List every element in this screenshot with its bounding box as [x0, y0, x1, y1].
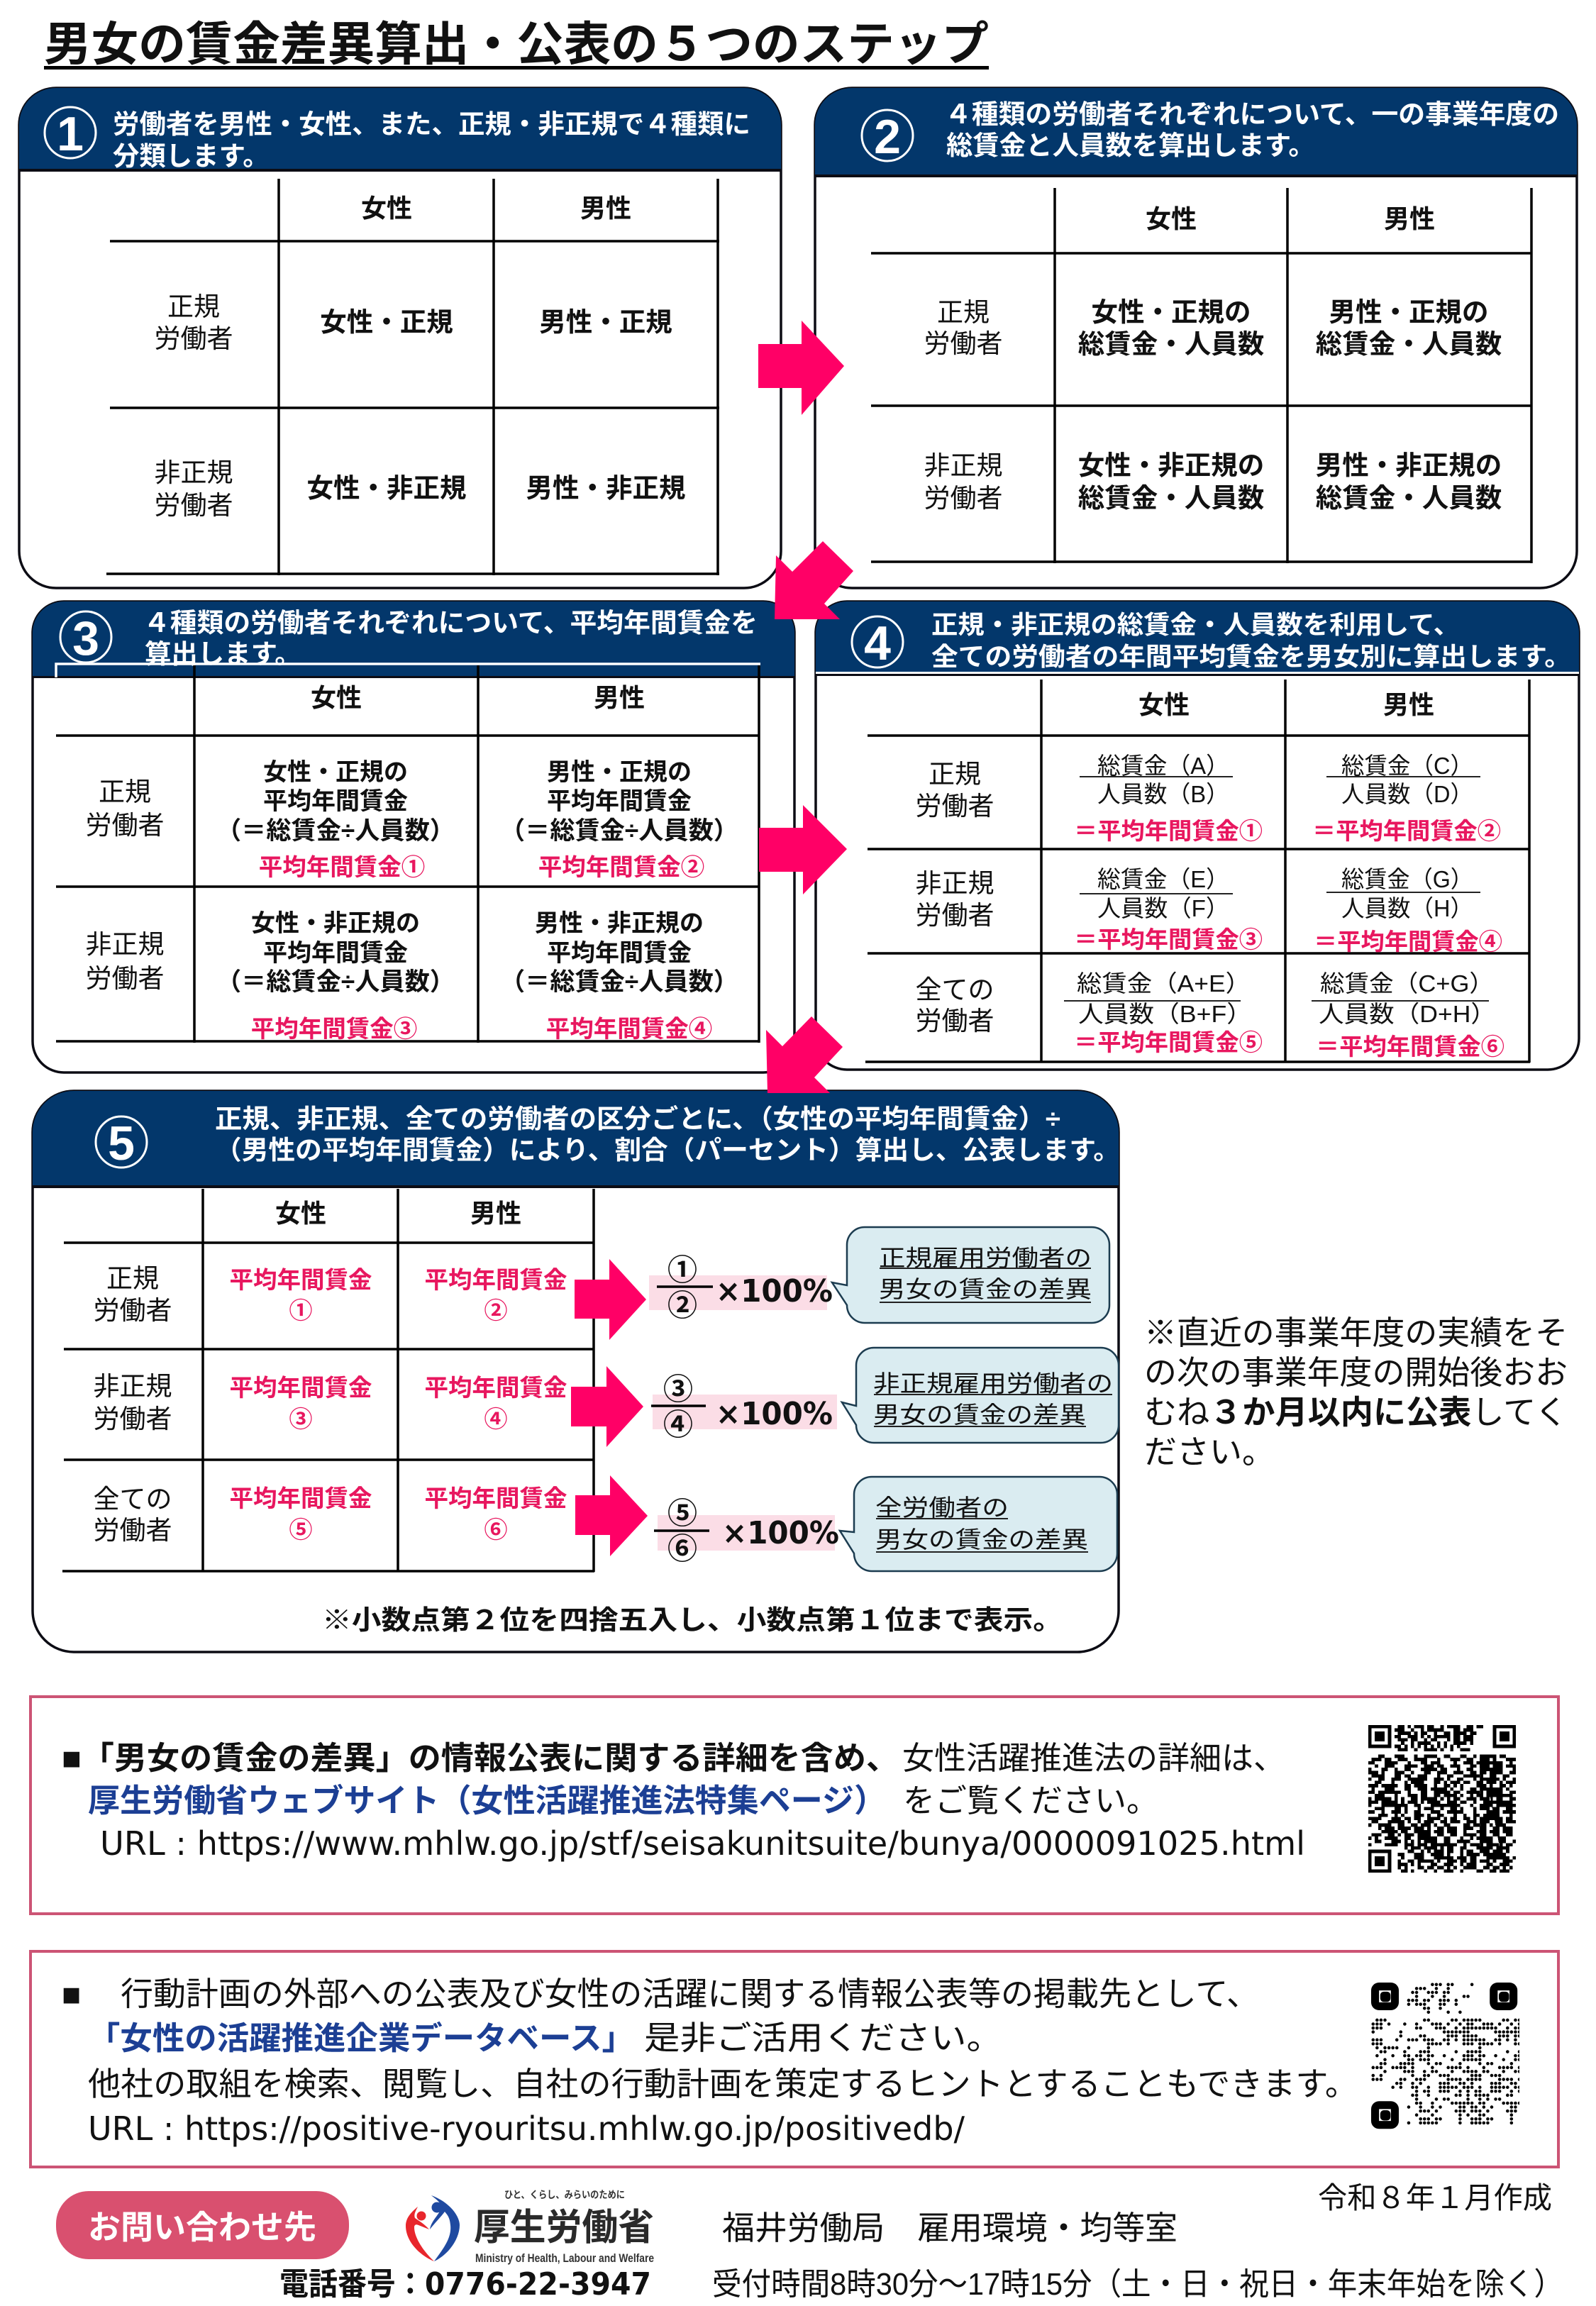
step 2 header: ４種類の労働者それぞれについて、一の事業年度の [945, 99, 1559, 129]
info box: company database: 「女性の活躍推進企業データベース」 [88, 2020, 634, 2056]
panel: step 2 [815, 88, 1577, 588]
step 4 table: 全ての [915, 975, 994, 1004]
step 4 header [816, 602, 1579, 676]
panel: step 4 [816, 602, 1579, 1070]
step 4 table: ＝平均年間賃金② [1312, 818, 1501, 844]
callout: non-regular workers gap [842, 1348, 1119, 1443]
MHLW logo: 厚生労働省 [474, 2207, 654, 2249]
step 3 table: 女性 [311, 683, 362, 712]
step 1 header: 1 [57, 107, 84, 161]
step 3 table: （＝総賃金÷人員数） [216, 817, 455, 845]
step 2 table: 総賃金・人員数 [1316, 483, 1502, 513]
step 3 table: 男性 [594, 683, 645, 712]
info box: company database: URL : https://positive-ryouritsu.mhlw.go.jp/positivedb/ [88, 2110, 965, 2148]
step 2 table: 男性・正規の [1329, 297, 1488, 327]
formula: all workers: ×100% [722, 1515, 839, 1551]
step 5 table: ② [484, 1297, 508, 1324]
step 4 table: 総賃金（A） [1097, 753, 1229, 779]
step 5 table: ⑤ [289, 1517, 312, 1543]
step 4 header: 4 [864, 616, 891, 670]
step 5 table: 男性 [470, 1199, 521, 1228]
step 3 table: 女性・正規の [263, 759, 408, 786]
step 3 table: 平均年間賃金 [547, 940, 692, 967]
formula: non-regular workers: ③ [663, 1373, 693, 1406]
step 5 table: 平均年間賃金 [424, 1486, 567, 1512]
step 5 table: 平均年間賃金 [230, 1486, 372, 1512]
callout: all workers gap: 男女の賃金の差異 [875, 1526, 1088, 1553]
step 5 table: 労働者 [94, 1516, 172, 1545]
step 5 table: 女性 [275, 1199, 326, 1228]
step 5 header: 正規、非正規、全ての労働者の区分ごとに、（女性の平均年間賃金）÷ [215, 1104, 1060, 1133]
reception hours: 受付時間8時30分～17時15分（土・日・祝日・年末年始を除く） [712, 2267, 1563, 2302]
step 1 table: 男性 [580, 194, 631, 223]
callout: all workers gap: 全労働者の [875, 1495, 1009, 1521]
formula: non-regular workers [651, 1373, 837, 1441]
step 5 table: 平均年間賃金 [230, 1268, 372, 1294]
panel: step 1 [19, 88, 781, 588]
step 3 table: （＝総賃金÷人員数） [500, 817, 738, 845]
step 4 table: 総賃金（C+G） [1320, 970, 1494, 997]
step 2 table [871, 188, 1532, 563]
step 2 table: 非正規 [924, 451, 1003, 480]
step 1 table: 女性 [361, 194, 412, 223]
step 1 table: 労働者 [155, 324, 233, 353]
formula: non-regular workers: ④ [663, 1408, 693, 1441]
step 4 table: ＝平均年間賃金⑤ [1074, 1029, 1263, 1055]
QR code 1 [1368, 1725, 1516, 1873]
step 2 header: 2 [874, 110, 901, 164]
step 5 table: 平均年間賃金 [230, 1375, 372, 1402]
step 3 table: 平均年間賃金① [259, 855, 425, 881]
step 5 table: 正規 [106, 1264, 159, 1293]
step 4 table: ＝平均年間賃金③ [1074, 926, 1263, 953]
step 5 table: ③ [289, 1406, 312, 1432]
formula: regular workers [649, 1253, 833, 1322]
step 5 table: 平均年間賃金 [424, 1375, 567, 1402]
step 3 table [56, 665, 760, 1043]
step 4 table [865, 680, 1530, 1063]
info box: company database: 是非ご活用ください。 [644, 2019, 1002, 2056]
step 5 header [33, 1091, 1120, 1188]
publication timing note: むね３か月以内に公表してく [1144, 1394, 1568, 1431]
step 4 table: 人員数（H） [1341, 895, 1473, 921]
formula: all workers: ⑤ [667, 1497, 697, 1530]
info box: MHLW website: ■「男女の賃金の差異」の情報公表に関する詳細を含め、 [62, 1740, 899, 1776]
step 3 header [33, 602, 794, 678]
step 5 table: ④ [484, 1406, 508, 1432]
step 1 table: 労働者 [155, 491, 233, 520]
step 4 table: 男性 [1383, 690, 1434, 719]
info box: MHLW website: 女性活躍推進法の詳細は、 [902, 1740, 1285, 1776]
step 1 table: 非正規 [155, 458, 233, 487]
step 5 table [62, 1189, 594, 1572]
step 4 table: 女性 [1138, 690, 1190, 719]
step 4 table: 総賃金（C） [1341, 753, 1473, 779]
step 4 table: 人員数（D+H） [1319, 1001, 1496, 1027]
panel: step 3 [33, 602, 794, 1072]
step 2 table: 女性 [1146, 204, 1197, 233]
rounding note: ※小数点第２位を四捨五入し、小数点第１位まで表示。 [322, 1606, 1063, 1636]
info box: company database: 行動計画の外部への公表及び女性の活躍に関する情報公表等の掲載先として、 [121, 1975, 1259, 2012]
arrow: step 4 to 5 [766, 1016, 843, 1093]
step 3 header: 3 [72, 611, 99, 665]
step 5 table: ⑥ [484, 1517, 508, 1543]
arrow: to all workers formula [575, 1475, 648, 1556]
step 4 table: 人員数（B） [1097, 781, 1229, 807]
callout: non-regular workers gap: 男女の賃金の差異 [873, 1402, 1086, 1428]
step 2 table: 総賃金・人員数 [1078, 329, 1264, 359]
publication timing note: ださい。 [1144, 1434, 1275, 1470]
QR code 2 [1371, 1983, 1519, 2129]
step 2 table: 男性 [1384, 204, 1435, 233]
step 2 table: 正規 [937, 298, 990, 327]
step 1 header [19, 88, 781, 172]
step 4 table: 総賃金（G） [1341, 866, 1473, 892]
step 3 table: 平均年間賃金 [263, 788, 408, 815]
step 3 table: 労働者 [85, 964, 165, 993]
step 2 table: 労働者 [924, 484, 1003, 513]
step 1 header: 労働者を男性・女性、また、正規・非正規で４種類に [113, 109, 750, 139]
step 4 table: 人員数（B+F） [1078, 1001, 1252, 1027]
step 2 table: 女性・正規の [1091, 297, 1251, 327]
step 4 table: 総賃金（E） [1097, 866, 1229, 892]
arrow: step 2 to 3 [775, 541, 853, 619]
callout: non-regular workers gap: 非正規雇用労働者の [873, 1370, 1113, 1397]
step 3 header: ４種類の労働者それぞれについて、平均年間賃金を [143, 608, 758, 638]
step 5 table: 労働者 [94, 1296, 172, 1325]
formula: regular workers: ① [667, 1253, 697, 1287]
arrow: step 3 to 4 [759, 805, 847, 894]
publication timing note: ※直近の事業年度の実績をそ [1144, 1314, 1568, 1351]
title: 男女の賃金差異算出・公表の５つのステップ [44, 18, 989, 70]
step 3 table: 女性・非正規の [251, 910, 420, 937]
MHLW logo [406, 2189, 654, 2265]
step 3 table: 平均年間賃金④ [546, 1016, 712, 1043]
step 5 header: （男性の平均年間賃金）により、割合（パーセント）算出し、公表します。 [215, 1136, 1120, 1165]
contact office name: 福井労働局 雇用環境・均等室 [722, 2210, 1177, 2246]
step 2 header: 総賃金と人員数を算出します。 [946, 131, 1315, 160]
info box: company database: 他社の取組を検索、閲覧し、自社の行動計画を策定するヒントとすることもできます。 [88, 2066, 1358, 2102]
step 1 header: 分類します。 [113, 141, 270, 171]
step 4 table: 非正規 [915, 869, 994, 898]
step 3 table: 正規 [99, 777, 151, 806]
step 2 table: 労働者 [924, 329, 1003, 358]
creation date: 令和８年１月作成 [1318, 2181, 1552, 2214]
step 4 table: ＝平均年間賃金⑥ [1316, 1033, 1504, 1060]
step 1 table: 女性・非正規 [306, 473, 467, 503]
MHLW logo: Ministry of Health, Labour and Welfare [475, 2251, 654, 2265]
step 5 table: 労働者 [94, 1404, 172, 1434]
step 4 header: 正規・非正規の総賃金・人員数を利用して、 [931, 610, 1460, 639]
step 5 table: 全ての [94, 1485, 172, 1514]
step 1 table: 正規 [167, 292, 220, 321]
step 3 table: 男性・非正規の [535, 910, 704, 937]
callout: regular workers gap: 正規雇用労働者の [879, 1245, 1092, 1271]
callout: regular workers gap [832, 1227, 1109, 1323]
step 5 header: 5 [108, 1116, 135, 1170]
arrow: to non-regular formula [571, 1366, 643, 1447]
callout: all workers gap [840, 1477, 1117, 1571]
panel: step 5 [33, 1091, 1120, 1652]
contact label pill: お問い合わせ先 [88, 2209, 316, 2246]
arrow: step 1 to 2 [758, 321, 844, 415]
step 2 table: 男性・非正規の [1316, 450, 1502, 480]
callout: regular workers gap: 男女の賃金の差異 [879, 1276, 1092, 1302]
step 1 table: 男性・非正規 [526, 473, 685, 503]
step 2 table: 女性・非正規の [1078, 450, 1264, 480]
step 4 table: 総賃金（A+E） [1077, 970, 1251, 997]
icon: heart figures [406, 2195, 460, 2261]
info box: company database [31, 1951, 1558, 2167]
step 3 table: 労働者 [85, 811, 165, 840]
step 3 table: （＝総賃金÷人員数） [500, 968, 738, 996]
info box: MHLW website: URL : https://www.mhlw.go.jp/stf/seisakunitsuite/bunya/0000091025.html [100, 1824, 1305, 1863]
step 3 table: 平均年間賃金② [538, 855, 704, 881]
step 4 table: 人員数（F） [1097, 895, 1229, 921]
step 4 table: 正規 [929, 760, 981, 789]
publication timing note [1144, 1314, 1568, 1470]
step 5 table: 平均年間賃金 [424, 1268, 567, 1294]
formula: regular workers: ×100% [716, 1273, 833, 1309]
step 4 table: ＝平均年間賃金① [1074, 818, 1263, 844]
step 3 table: 非正規 [85, 930, 165, 959]
step 4 table: 労働者 [915, 1007, 994, 1036]
info box: MHLW website [31, 1697, 1558, 1914]
step 4 header: 全ての労働者の年間平均賃金を男女別に算出します。 [931, 642, 1571, 671]
step 1 table [106, 179, 719, 575]
info box: MHLW website: 厚生労働省ウェブサイト（女性活躍推進法特集ページ） [88, 1783, 886, 1819]
step 2 header [815, 88, 1577, 177]
formula: non-regular workers: ×100% [716, 1396, 833, 1432]
step 3 header: 算出します。 [145, 639, 301, 669]
step 3 table: 平均年間賃金③ [251, 1016, 417, 1043]
step 2 table: 総賃金・人員数 [1316, 329, 1502, 359]
step 1 table: 女性・正規 [320, 307, 453, 337]
step 4 table: ＝平均年間賃金④ [1314, 929, 1502, 955]
step 3 table: （＝総賃金÷人員数） [216, 968, 455, 996]
step 2 table: 総賃金・人員数 [1078, 483, 1264, 513]
step 4 table: 人員数（D） [1341, 781, 1473, 807]
arrow: to regular formula [575, 1259, 646, 1340]
step 4 table: 労働者 [915, 901, 994, 930]
formula: all workers [654, 1497, 839, 1565]
step 3 table: 平均年間賃金 [547, 788, 692, 815]
step 5 table: 非正規 [94, 1372, 172, 1401]
step 3 table: 平均年間賃金 [263, 940, 408, 967]
step 1 table: 男性・正規 [539, 307, 672, 337]
publication timing note: の次の事業年度の開始後おお [1144, 1354, 1568, 1391]
step 5 table: ① [289, 1297, 312, 1324]
info box: MHLW website: をご覧ください。 [903, 1783, 1158, 1819]
step 4 table: 労働者 [915, 792, 994, 821]
formula: all workers: ⑥ [667, 1532, 697, 1565]
step 3 table: 男性・正規の [547, 759, 692, 786]
info box: company database: ■ [62, 1976, 81, 2012]
phone number: 電話番号：0776-22-3947 [279, 2266, 651, 2302]
contact label pill [56, 2191, 349, 2259]
MHLW logo: ひと、くらし、みらいのために [504, 2189, 625, 2200]
formula: regular workers: ② [667, 1289, 697, 1322]
